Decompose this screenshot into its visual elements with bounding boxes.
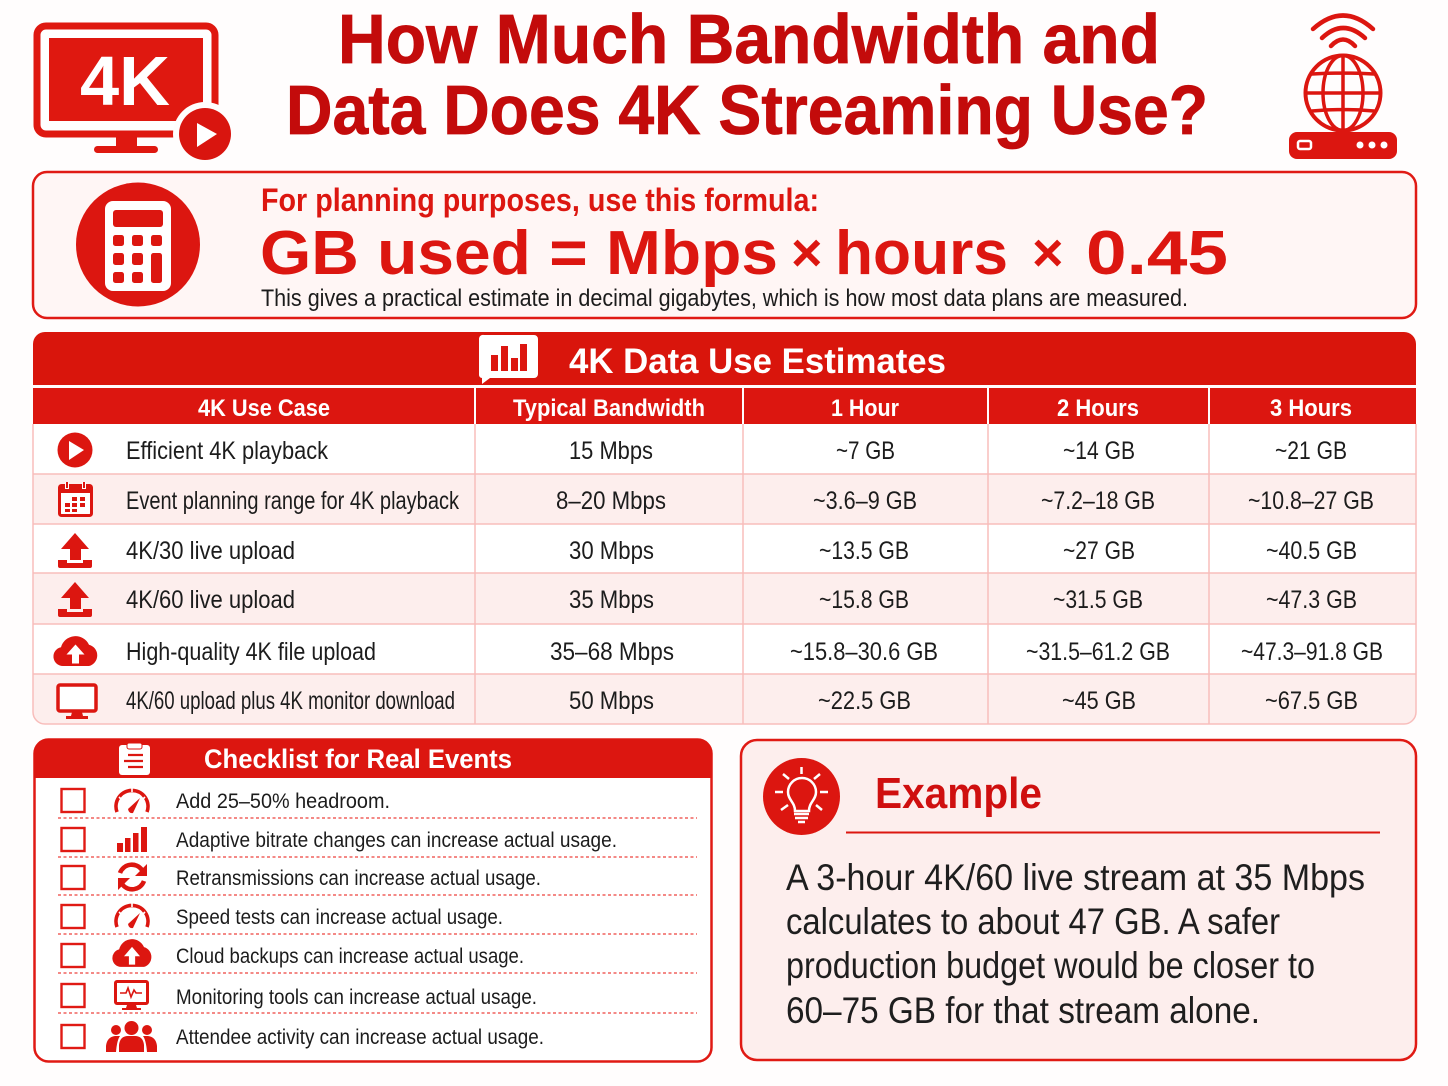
formula note: This gives a practical estimate in decimal gigabytes, which is how most data plans are measured. (261, 285, 1188, 312)
title: Data Does 4K Streaming Use? (286, 71, 1208, 149)
row: efficient 4K playback (58, 432, 1347, 468)
formula: × (1032, 223, 1064, 283)
row: 4K/60 live upload: ~31.5 GB (1053, 586, 1143, 614)
checklist header: Checklist for Real Events (204, 744, 512, 774)
panel: formula (33, 172, 1416, 318)
icon: bar chart bubble (479, 335, 538, 384)
row: event planning range: 8–20 Mbps (556, 487, 666, 515)
row: efficient 4K playback: ~21 GB (1275, 437, 1347, 465)
row: upload plus monitor download: ~22.5 GB (818, 687, 911, 715)
formula: hours (835, 219, 1008, 288)
item: cloud backups: Cloud backups can increase actual usage. (176, 944, 524, 968)
example body text: A 3-hour 4K/60 live stream at 35 Mbps (786, 857, 1365, 898)
table title bar (33, 332, 1416, 385)
table column headers: 1 Hour (831, 395, 899, 422)
row: high-quality file upload: ~47.3–91.8 GB (1241, 638, 1383, 666)
item: retransmissions: Retransmissions can increase actual usage. (176, 866, 541, 890)
panel: data use table (33, 332, 1416, 724)
item: monitoring tools: Monitoring tools can increase actual usage. (176, 985, 537, 1009)
row: high-quality file upload: High-quality 4K file upload (126, 638, 376, 666)
icon: 4K monitor with play button (37, 26, 237, 166)
panel: checklist (34, 739, 712, 1062)
item: speed tests (62, 903, 503, 929)
row: upload plus monitor download (58, 685, 1358, 719)
item: attendee activity: Attendee activity can increase actual usage. (176, 1025, 544, 1049)
panel: example (741, 740, 1416, 1060)
icon: 4K monitor with play button: 4K (80, 42, 170, 120)
row: efficient 4K playback: 15 Mbps (569, 437, 653, 465)
row: event planning range: ~7.2–18 GB (1041, 487, 1155, 515)
checklist header (34, 739, 712, 778)
row: event planning range: ~10.8–27 GB (1248, 487, 1374, 515)
row: upload plus monitor download: 50 Mbps (569, 687, 654, 715)
example body text: calculates to about 47 GB. A safer (786, 901, 1280, 942)
row: 4K/30 live upload (58, 533, 1357, 568)
row: 4K/60 live upload: ~15.8 GB (819, 586, 909, 614)
row: upload plus monitor download: ~67.5 GB (1265, 687, 1358, 715)
row: event planning range: Event planning range for 4K playback (126, 487, 459, 515)
row: efficient 4K playback: ~14 GB (1063, 437, 1135, 465)
row: 4K/30 live upload: 4K/30 live upload (126, 537, 295, 565)
example body text: 60–75 GB for that stream alone. (786, 990, 1260, 1031)
row: 4K/30 live upload: ~40.5 GB (1266, 537, 1357, 565)
row: efficient 4K playback: ~7 GB (836, 437, 895, 465)
row: high-quality file upload: ~31.5–61.2 GB (1026, 638, 1170, 666)
row: 4K/60 live upload: 4K/60 live upload (126, 586, 295, 614)
row: event planning range (59, 482, 1374, 516)
item: adaptive bitrate (62, 827, 617, 852)
icon: globe router with wifi (1289, 16, 1397, 159)
formula: GB used = Mbps (260, 219, 778, 288)
item: attendee activity (62, 1021, 544, 1052)
example body text: production budget would be closer to (786, 945, 1315, 986)
row: 4K/30 live upload: 30 Mbps (569, 537, 654, 565)
row: 4K/60 live upload: ~47.3 GB (1266, 586, 1357, 614)
row: upload plus monitor download: ~45 GB (1062, 687, 1136, 715)
row: high-quality file upload: 35–68 Mbps (550, 638, 674, 666)
item: retransmissions (62, 864, 541, 890)
table column headers (33, 388, 1416, 424)
row: 4K/60 live upload: 35 Mbps (569, 586, 654, 614)
item: adaptive bitrate: Adaptive bitrate changes can increase actual usage. (176, 828, 617, 852)
row: 4K/30 live upload: ~13.5 GB (819, 537, 909, 565)
item: headroom (62, 788, 390, 813)
row: upload plus monitor download: 4K/60 upload plus 4K monitor download (126, 687, 455, 715)
title (286, 0, 1208, 149)
item: cloud backups (62, 939, 524, 968)
row: 4K/60 live upload (58, 582, 1357, 617)
example body text (786, 857, 1365, 1031)
row: efficient 4K playback: Efficient 4K playback (126, 437, 328, 465)
formula: × (791, 223, 823, 283)
row: event planning range: ~3.6–9 GB (813, 487, 917, 515)
table column headers: 2 Hours (1057, 395, 1139, 422)
row: high-quality file upload (53, 636, 1383, 666)
title: How Much Bandwidth and (338, 0, 1160, 78)
icon: calculator (76, 182, 200, 306)
icon: clipboard (119, 743, 150, 775)
example heading: Example (875, 769, 1042, 818)
table column headers: 3 Hours (1270, 395, 1352, 422)
item: monitoring tools (62, 982, 537, 1010)
item: headroom: Add 25–50% headroom. (176, 789, 390, 813)
table column headers: 4K Use Case (198, 395, 330, 422)
formula lead-in: For planning purposes, use this formula: (261, 182, 819, 218)
table column headers: Typical Bandwidth (513, 395, 705, 422)
icon: light bulb (763, 758, 840, 835)
table title bar: 4K Data Use Estimates (569, 342, 946, 381)
row: high-quality file upload: ~15.8–30.6 GB (790, 638, 938, 666)
item: speed tests: Speed tests can increase actual usage. (176, 905, 503, 929)
formula (260, 219, 1228, 288)
row: 4K/30 live upload: ~27 GB (1063, 537, 1135, 565)
formula: 0.45 (1086, 219, 1228, 288)
